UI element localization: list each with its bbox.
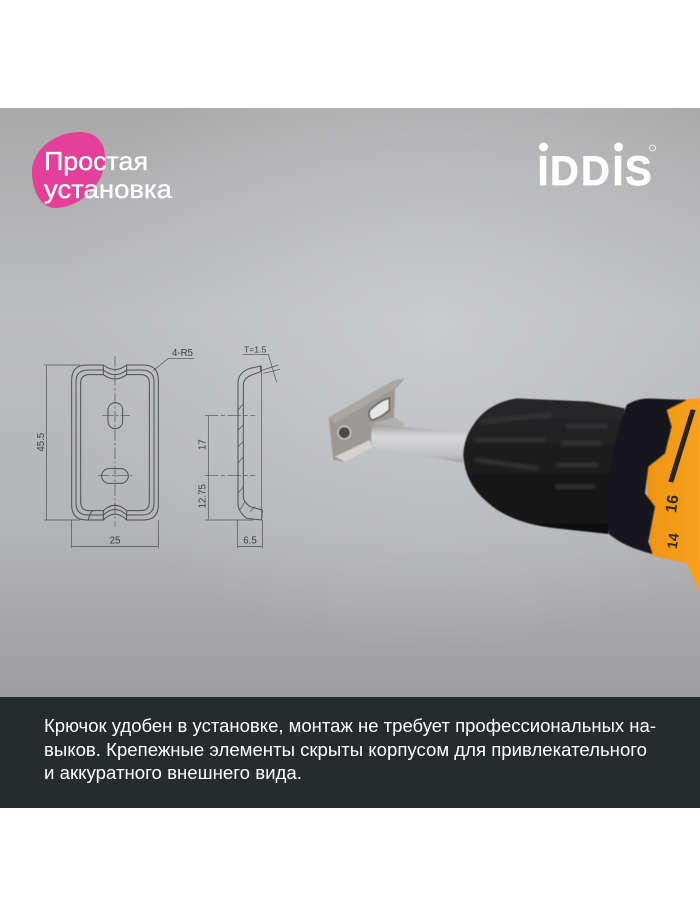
dimension labels: 45.5 (36, 433, 47, 452)
technical drawing (36, 345, 280, 548)
dimension lines (44, 354, 280, 548)
orange drill body (643, 398, 700, 593)
logo: IDDIS: IDDIS (538, 147, 652, 194)
chuck (463, 398, 625, 534)
dimension labels: 4-R5 (172, 348, 193, 359)
black collar (607, 398, 687, 554)
dimension labels: 17 (198, 439, 209, 450)
orange body markings: 16 (663, 494, 682, 514)
caption panel (0, 697, 700, 808)
badge: pink blob (32, 132, 105, 208)
orange body markings (663, 409, 696, 550)
orange body markings: 14 (664, 532, 682, 550)
background photo wall (0, 108, 700, 697)
caption text: и аккуратного внешнего вида. (44, 762, 302, 783)
front view of bracket (72, 356, 158, 527)
metal bracket (329, 378, 405, 462)
drill photo illustration (329, 378, 700, 593)
caption text: выков. Крепежные элементы скрыты корпусом для привлекательного (44, 739, 647, 760)
caption text: Крючок удобен в установке, монтаж не требует профессиональных на- (44, 715, 656, 736)
side view of bracket (205, 366, 262, 520)
dimension labels: 6.5 (243, 535, 257, 546)
heading: Простая установка (44, 146, 173, 204)
dimension labels: 25 (110, 535, 120, 546)
dimension labels: T=1.5 (244, 345, 267, 355)
drill bit (371, 424, 467, 463)
heading: Простая установка: Простая (44, 146, 148, 176)
caption text (44, 715, 656, 783)
heading: Простая установка: установка (44, 174, 173, 204)
dimension labels: 12.75 (198, 484, 209, 508)
dimension labels (36, 345, 267, 546)
